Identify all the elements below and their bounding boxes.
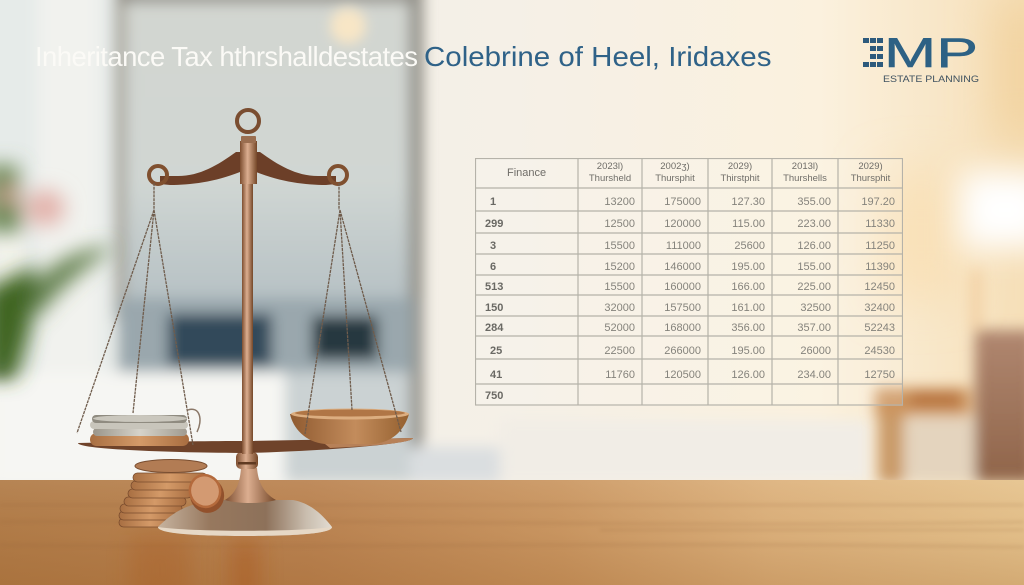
table body rows: 284 [485, 322, 503, 334]
lower plate [78, 438, 413, 453]
table body rows: 26000 [800, 345, 831, 357]
table body rows: 126.00 [797, 240, 831, 252]
table body rows: 32400 [864, 302, 895, 314]
table body rows: 11390 [865, 261, 895, 273]
table body rows: 11330 [865, 218, 895, 230]
table body rows: 120000 [664, 218, 701, 230]
table body rows: 266000 [664, 345, 701, 357]
table body rows: 6 [490, 261, 496, 273]
table body rows: 126.00 [731, 369, 765, 381]
title: Inheritance Tax hthrshalldestates [35, 41, 417, 72]
table body rows: 25600 [734, 240, 765, 252]
table header row: 2023l) [597, 161, 623, 172]
table header row: Thirstphit [720, 173, 760, 184]
table body rows: 52000 [604, 322, 635, 334]
table body rows: 355.00 [797, 196, 831, 208]
table body rows: 22500 [604, 345, 635, 357]
table body rows: 225.00 [797, 281, 831, 293]
table body rows: 234.00 [797, 369, 831, 381]
table body rows: 11760 [605, 369, 635, 381]
table body rows: 155.00 [797, 261, 831, 273]
table body rows: 11250 [865, 240, 895, 252]
table body rows [485, 196, 895, 402]
table header row [507, 161, 890, 184]
table body rows: 15500 [604, 240, 635, 252]
table body rows: 357.00 [797, 322, 831, 334]
table body rows: 1 [490, 196, 496, 208]
table body rows: 32000 [604, 302, 635, 314]
icon: dotted square logo mark [863, 38, 883, 67]
table body rows: 12450 [864, 281, 895, 293]
table header row: Thursheld [589, 173, 631, 184]
table body rows: 41 [490, 369, 502, 381]
table body rows: 3 [490, 240, 496, 252]
table header row: Finance [507, 167, 546, 179]
table body rows: 750 [485, 390, 503, 402]
table body rows: 127.30 [731, 196, 765, 208]
table body rows: 25 [490, 345, 502, 357]
table body rows: 157500 [664, 302, 701, 314]
table header row: 2029) [858, 161, 883, 172]
table header row: 2029) [728, 161, 752, 172]
leaning coin [185, 471, 229, 518]
table body rows: 120500 [664, 369, 701, 381]
logo: EMP Estate Planning: ESTATE PLANNING [883, 74, 979, 84]
table body rows: 223.00 [797, 218, 831, 230]
table body rows: 160000 [664, 281, 701, 293]
right bowl [290, 408, 409, 444]
table body rows: 32500 [800, 302, 831, 314]
table body rows: 150 [485, 302, 503, 314]
table body rows: 168000 [664, 322, 701, 334]
coin stack on table [119, 460, 207, 527]
table header row: 2002ʒ) [660, 161, 690, 172]
wooden table [0, 480, 1024, 585]
table body rows: 13200 [604, 196, 635, 208]
table header row: Thursphit [655, 173, 695, 184]
silver and copper coins on left pan [90, 409, 200, 446]
table body rows: 111000 [666, 240, 701, 252]
table body rows: 146000 [664, 261, 701, 273]
scale base [158, 452, 332, 536]
chains [77, 183, 401, 445]
title [35, 41, 771, 72]
table header row: 2013l) [792, 161, 818, 172]
table body rows: 195.00 [731, 345, 765, 357]
logo: EMP Estate Planning [863, 35, 979, 84]
table body rows: 161.00 [731, 302, 765, 314]
table body rows: 513 [485, 281, 503, 293]
table header row: Thursphit [851, 173, 890, 184]
table body rows: 166.00 [731, 281, 765, 293]
table body rows: 299 [485, 218, 503, 230]
table body rows: 175000 [664, 196, 701, 208]
table body rows: 24530 [864, 345, 895, 357]
table body rows: 52243 [864, 322, 895, 334]
table body rows: 12500 [604, 218, 635, 230]
data table [475, 158, 903, 406]
table body rows: 115.00 [732, 218, 765, 230]
title: Colebrine of Heel, Iridaxes [424, 41, 771, 72]
table body rows: 15200 [604, 261, 635, 273]
table body rows: 356.00 [731, 322, 765, 334]
table body rows: 12750 [864, 369, 895, 381]
table header row: Thurshells [783, 173, 827, 184]
table body rows: 195.00 [731, 261, 765, 273]
scale pillar, beam and ring [149, 110, 347, 454]
table body rows: 197.20 [861, 196, 895, 208]
table body rows: 15500 [604, 281, 635, 293]
